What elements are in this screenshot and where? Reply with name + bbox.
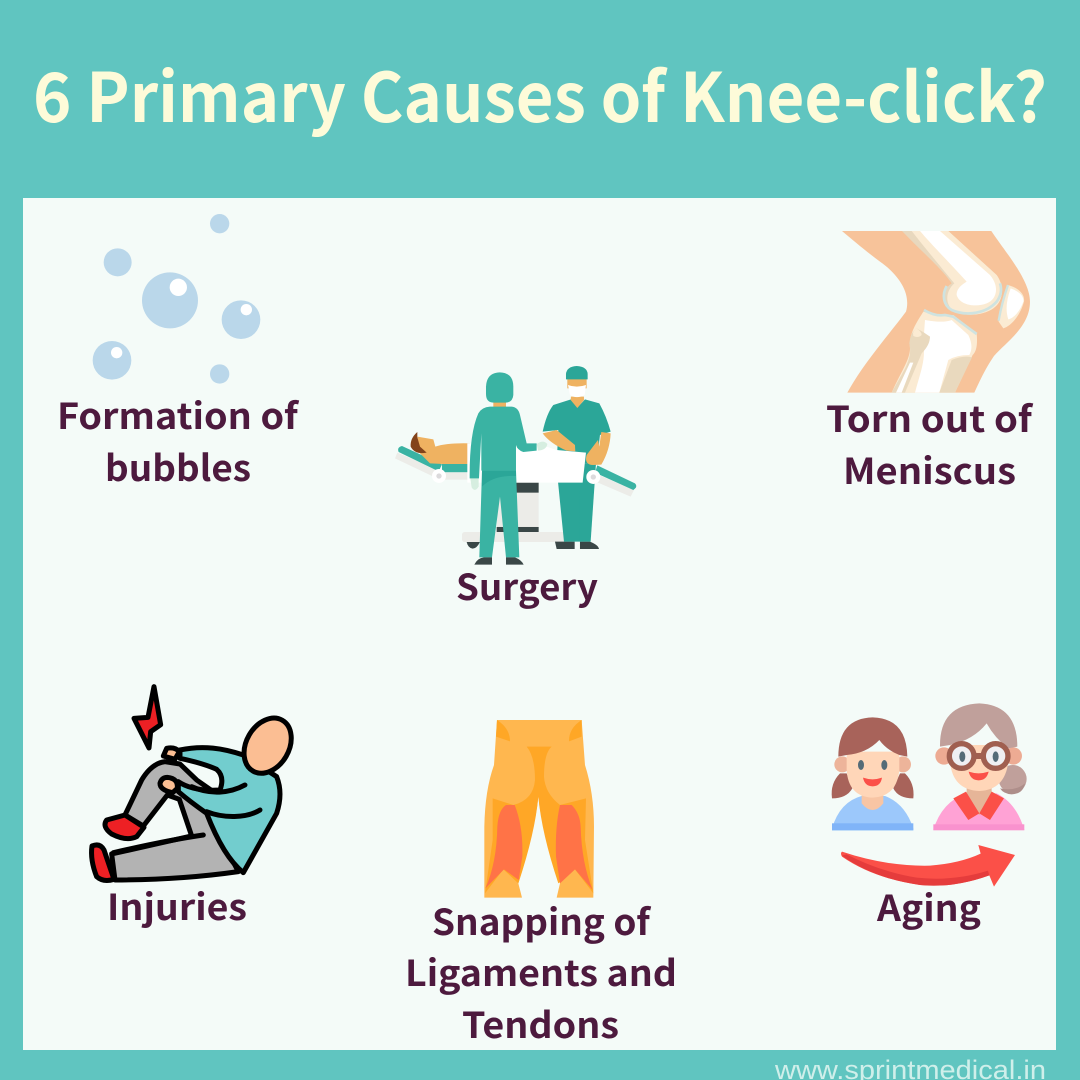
icon: bubbles [93,214,260,384]
label: Snapping of Ligaments and Tendons: Ligaments and [405,945,677,997]
label: Formation of bubbles: bubbles [105,440,251,492]
panel: causes [23,198,1056,1050]
label: Torn out of Meniscus: Torn out of [826,391,1034,443]
label: Snapping of Ligaments and Tendons: Snapping of [432,894,652,946]
label: Surgery: Surgery [456,559,598,611]
label: Torn out of Meniscus: Meniscus [843,443,1016,495]
icon: person holding injured knee [92,687,301,881]
label: Aging: Aging [876,880,981,932]
label: Formation of bubbles [57,388,300,492]
label: Snapping of Ligaments and Tendons [405,894,677,1049]
label: Injuries: Injuries [107,879,247,931]
label: Snapping of Ligaments and Tendons: Tendons [462,997,619,1049]
title: 6 Primary Causes of Knee-click? [33,43,1047,142]
icon: child and older woman with arrow [832,703,1027,887]
icon: knee joint [842,231,1030,393]
icon: leg muscles [484,720,594,898]
icon: surgery [395,366,636,565]
label: Torn out of Meniscus [826,391,1034,495]
label: Formation of bubbles: Formation of [57,388,300,440]
